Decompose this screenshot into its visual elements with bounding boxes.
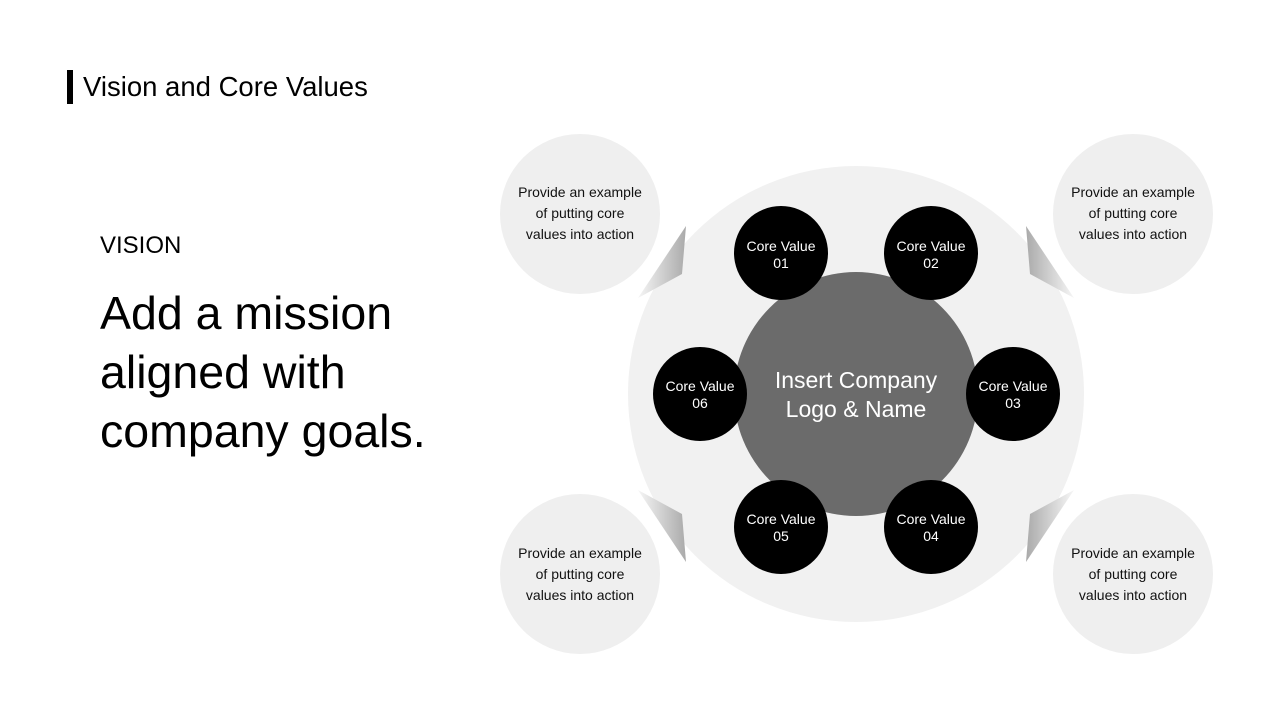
text: mission statement: Add a mission (100, 287, 392, 339)
core value circles (653, 206, 1060, 574)
core value circles: Core Value (746, 511, 816, 527)
example circles: Provide an example (518, 545, 642, 561)
core value circles: 03 (1005, 395, 1021, 411)
example circles: values into action (526, 587, 634, 603)
text: mission statement (100, 287, 426, 457)
center circle (734, 272, 978, 516)
core value circles: Core Value (896, 511, 966, 527)
example circles: Provide an example (1071, 184, 1195, 200)
title: Vision and Core Values (83, 71, 368, 102)
example circles: Provide an example (518, 184, 642, 200)
core value circles: 04 (923, 528, 939, 544)
example circles: of putting core (536, 205, 625, 221)
core value circles: Core Value (665, 378, 735, 394)
core value circles: 05 (773, 528, 789, 544)
core value circles: 02 (923, 255, 939, 271)
center circle: Insert Company (775, 367, 938, 393)
core value circles: Core Value (978, 378, 1048, 394)
example circles: values into action (526, 226, 634, 242)
example circles: of putting core (1089, 566, 1178, 582)
example circles: values into action (1079, 587, 1187, 603)
big background circle (628, 166, 1084, 622)
example circles: values into action (1079, 226, 1187, 242)
example circles: Provide an example (1071, 545, 1195, 561)
core value circles: Core Value (896, 238, 966, 254)
text: mission statement: aligned with (100, 346, 346, 398)
example circles: of putting core (1089, 205, 1178, 221)
arrows (638, 226, 1074, 562)
text: mission statement: company goals. (100, 405, 426, 457)
core value circles: Core Value (746, 238, 816, 254)
center circle: Logo & Name (786, 396, 926, 422)
core value circles: 06 (692, 395, 708, 411)
text: vision label: VISION (100, 232, 181, 259)
example circles (500, 134, 1213, 654)
core value circles: 01 (773, 255, 789, 271)
example circles: of putting core (536, 566, 625, 582)
